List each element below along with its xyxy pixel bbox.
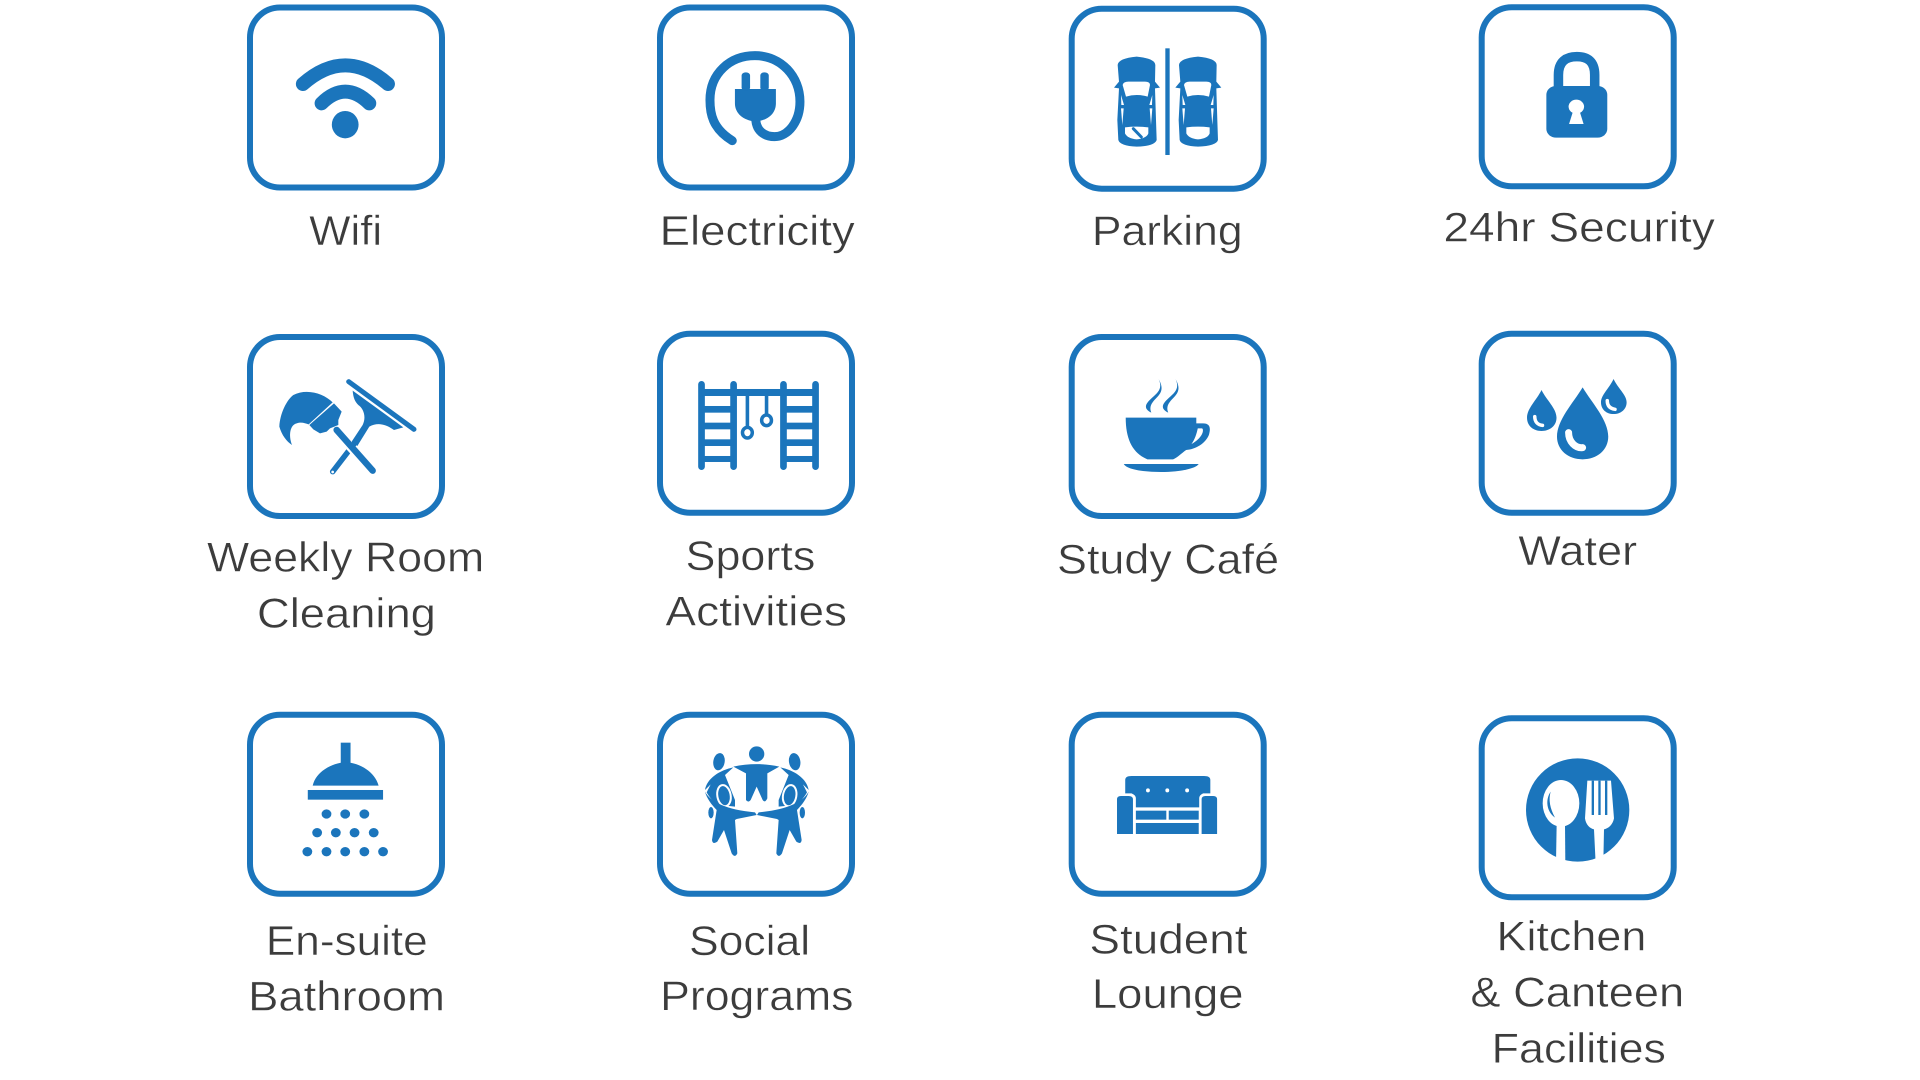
label: Cleaning [257, 589, 436, 636]
label [1089, 915, 1248, 1017]
icon frame [250, 8, 442, 188]
label: Programs [660, 972, 854, 1019]
label: 24hr Security [1443, 204, 1715, 251]
tile: Kitchen & Canteen Facilities [1470, 718, 1684, 1071]
label: Social [689, 917, 810, 964]
label: Parking [1092, 207, 1243, 254]
label [207, 534, 484, 636]
tile: Wifi [250, 8, 442, 254]
tile: Parking [1072, 9, 1264, 254]
icon: shower [302, 743, 388, 856]
icon frame [1072, 9, 1264, 189]
icon frame [250, 337, 442, 516]
label: Sports [686, 532, 815, 579]
label: Water [1518, 527, 1637, 574]
icon: sofa [1117, 776, 1217, 834]
label: Bathroom [248, 973, 445, 1020]
tile: En-suite Bathroom [248, 715, 445, 1020]
tile: Student Lounge [1072, 715, 1264, 1017]
label: Activities [665, 588, 847, 635]
icon frame [1482, 7, 1674, 186]
label: Kitchen [1496, 913, 1646, 960]
icon frame [660, 334, 852, 513]
icon: circle of people [705, 746, 809, 856]
label: Student [1089, 915, 1248, 962]
icon frame [250, 715, 442, 894]
label [1470, 913, 1684, 1071]
icon: spoon and fork on plate [1526, 758, 1629, 863]
label: Lounge [1092, 970, 1244, 1017]
icon frame [660, 715, 852, 894]
icon frame [1482, 718, 1674, 897]
icon frame [1072, 337, 1264, 516]
tile: Electricity [660, 8, 855, 254]
icon frame [660, 8, 852, 188]
label: Electricity [660, 207, 855, 254]
label [665, 532, 847, 635]
icon frame [1482, 334, 1674, 513]
icon: wifi [303, 65, 388, 138]
icon frame [1072, 715, 1264, 894]
label: En-suite [266, 917, 428, 964]
tile: Study Café [1057, 337, 1279, 582]
label [660, 917, 854, 1019]
label: Facilities [1492, 1024, 1666, 1071]
tile: Social Programs [660, 715, 854, 1019]
icon: two cars [1114, 48, 1221, 155]
label: Wifi [309, 207, 382, 254]
icon: climbing frame with rings [702, 384, 816, 467]
label [248, 917, 445, 1020]
icon: duster and squeegee [279, 382, 414, 473]
tile: Water [1482, 334, 1674, 574]
icon: water drops [1527, 379, 1627, 459]
label: Weekly Room [207, 534, 484, 581]
label: Study Café [1057, 535, 1279, 582]
icon: coffee cup [1124, 379, 1210, 472]
tile: Sports Activities [660, 334, 852, 635]
icon: padlock [1546, 57, 1607, 138]
label: & Canteen [1470, 969, 1684, 1016]
icon: plug [710, 56, 800, 141]
tile: 24hr Security [1443, 7, 1715, 251]
tile: Weekly Room Cleaning [207, 337, 484, 636]
